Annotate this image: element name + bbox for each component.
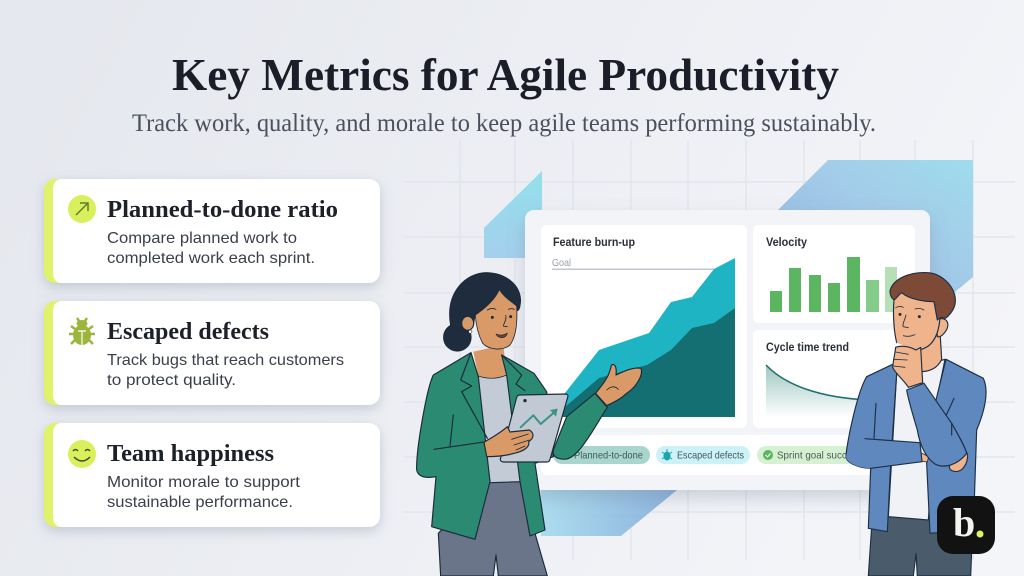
character: man thinking <box>846 273 986 576</box>
chip: escaped defects: Escaped defects <box>677 450 744 462</box>
text: escaped defects description: to protect quality. <box>107 372 236 389</box>
area and trend line <box>766 365 870 417</box>
chip: planned-to-done <box>553 446 650 464</box>
label: velocity: Velocity <box>766 237 808 249</box>
text: team happiness description: Monitor morale to support <box>107 474 301 491</box>
dashboard panel <box>525 210 930 490</box>
chart: velocity <box>753 225 915 323</box>
heading: planned-to-done ratio: Planned-to-done ratio <box>107 197 338 223</box>
area: scope <box>553 258 735 417</box>
character: woman with tablet <box>417 273 641 576</box>
text: team happiness description <box>107 474 301 511</box>
text: planned-to-done description: completed work each sprint. <box>107 250 315 267</box>
chart: cycle time trend <box>753 330 915 428</box>
decorative blue shape: right <box>778 160 973 292</box>
decorative blue shape: left <box>484 171 542 258</box>
logo badge: b <box>953 500 975 545</box>
logo badge <box>937 496 995 554</box>
panel: escaped defects <box>44 301 380 405</box>
icon: trend arrow <box>68 195 96 223</box>
chip: planned-to-done: Planned-to-done <box>574 450 643 462</box>
legend strip <box>541 435 915 475</box>
panel: team happiness <box>44 423 380 527</box>
label: cycle time trend: Cycle time trend <box>766 342 849 354</box>
area: completed work <box>553 308 735 417</box>
chip: sprint goal success: Sprint goal success <box>777 450 862 462</box>
subtitle: Track work, quality, and morale to keep agile teams performing sustainably. <box>132 110 876 137</box>
heading: team happiness: Team happiness <box>107 441 274 467</box>
decorative blue shape: bottom <box>541 490 677 536</box>
chip: sprint goal success <box>757 446 862 464</box>
label: feature burn-up: Feature burn-up <box>553 237 635 249</box>
text: escaped defects description <box>107 352 344 389</box>
chip: escaped defects <box>656 446 750 464</box>
text: team happiness description: sustainable performance. <box>107 494 293 511</box>
label: goal: Goal <box>552 257 571 269</box>
bars <box>770 257 897 312</box>
icon: bug <box>69 318 95 345</box>
title: Key Metrics for Agile Productivity <box>172 49 839 100</box>
heading: escaped defects: Escaped defects <box>107 319 269 345</box>
chart: feature burn-up <box>541 225 747 428</box>
icon: smiley <box>68 440 96 468</box>
text: planned-to-done description: Compare planned work to <box>107 230 297 247</box>
panel: planned-to-done ratio <box>44 179 380 283</box>
text: escaped defects description: Track bugs that reach customers <box>107 352 344 369</box>
text: planned-to-done description <box>107 230 315 267</box>
